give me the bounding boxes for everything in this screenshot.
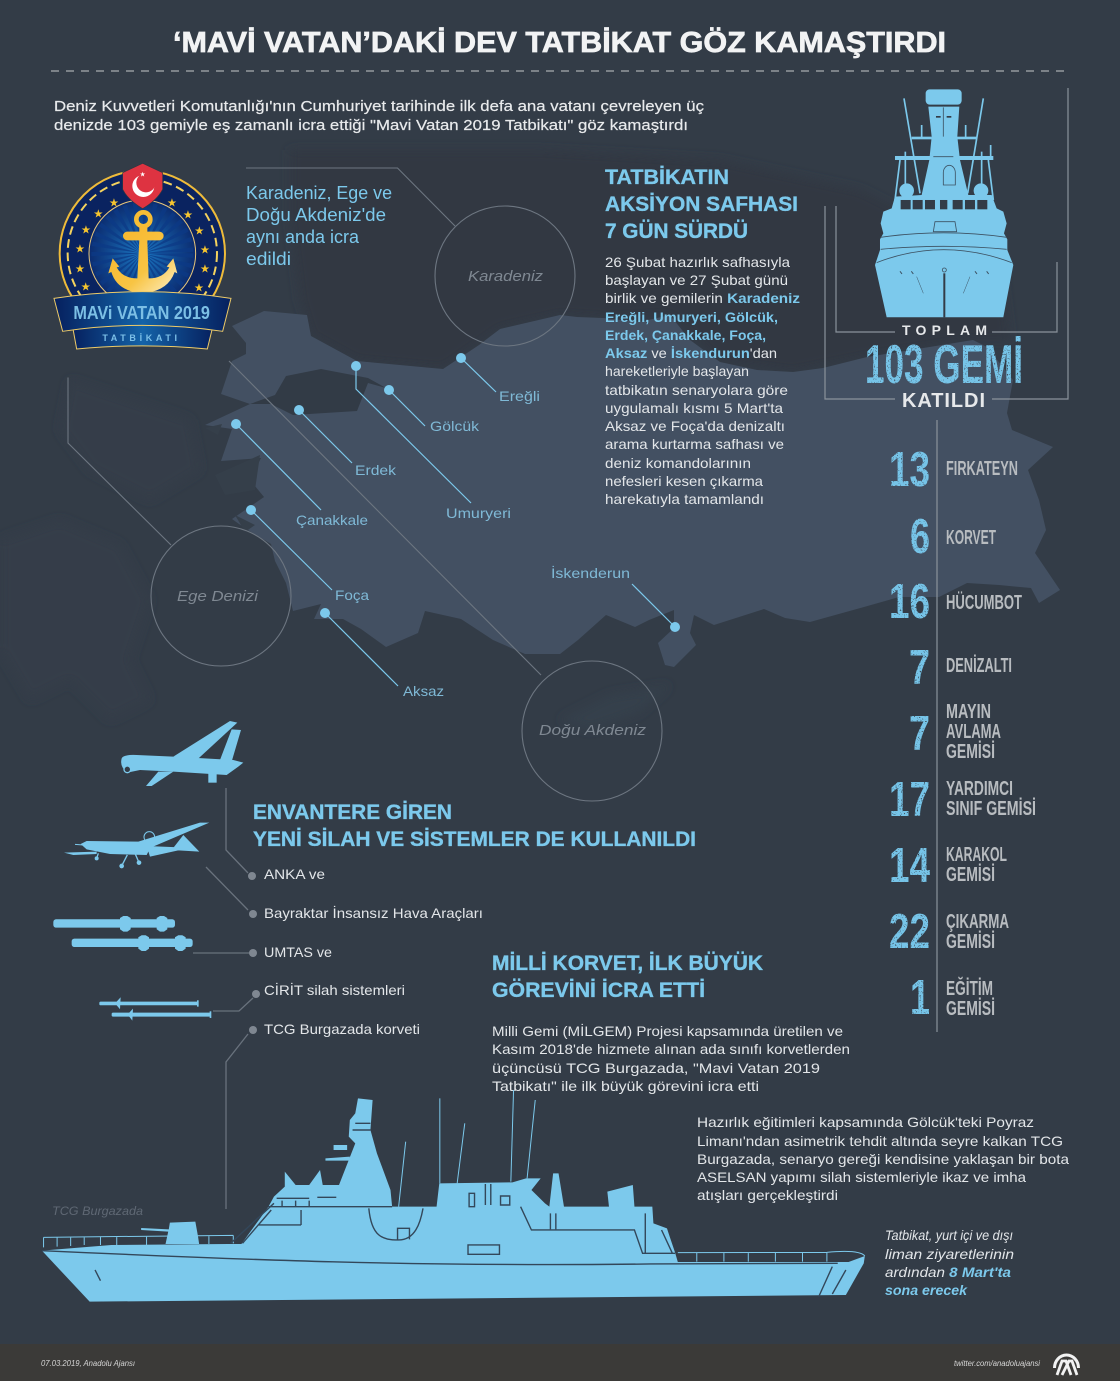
weapons list: ANKA ve [264, 866, 325, 882]
map: Black Sea and neighbouring land shading [0, 150, 1010, 730]
heading: action phase: AKSİYON SAFHASI [605, 193, 798, 216]
intro text [54, 99, 704, 134]
text: training details: atışları gerçekleştirdi [697, 1187, 838, 1203]
ship counts: 14 [889, 839, 930, 893]
ship counts: 22 [889, 905, 930, 959]
text: MILGEM project: Milli Gemi (MİLGEM) Projesi kapsamında üretilen ve [492, 1022, 843, 1039]
ship categories: GEMİSİ [946, 930, 995, 953]
port labels: Umuryeri [446, 505, 511, 521]
icon: corvette side view [42, 1090, 865, 1302]
text: action phase body: hareketleriyle başlayan [605, 363, 749, 379]
heading: national corvette: GÖREVİNİ İCRA ETTİ [492, 979, 705, 1002]
ship categories: AVLAMA [946, 721, 1001, 743]
ship categories: SINIF GEMİSİ [946, 797, 1036, 820]
text: action phase body: Aksaz ve Foça'da denizaltı [605, 418, 785, 434]
ship counts: 7 [909, 641, 930, 695]
ship categories: HÜCUMBOT [946, 591, 1022, 614]
intro text: denizde 103 gemiyle eş zamanlı icra ettiği "Mavi Vatan 2019 Tatbikatı" göz kamaştırdı [54, 118, 688, 134]
port labels: Ereğli [499, 388, 540, 404]
total label: TOPLAM [902, 322, 987, 338]
port labels: Foça [335, 587, 369, 603]
text: action phase body [605, 254, 800, 507]
frame lines around front-view ship [825, 88, 1068, 399]
heading: action phase [605, 166, 798, 243]
heading: national corvette [492, 952, 763, 1002]
badge ribbon upper: MAVi VATAN 2019 [73, 302, 210, 323]
heading: action phase: TATBİKATIN [605, 166, 729, 189]
weapons list [248, 866, 483, 1037]
ship categories: GEMİSİ [946, 997, 995, 1020]
text: action phase body: nefesleri kesen çıkarma [605, 473, 763, 489]
text: action phase body: 26 Şubat hazırlık safhasıyla [605, 254, 790, 270]
text: action phase body: Erdek, Çanakkale, Foça, [605, 327, 766, 343]
badge stars: ★ [194, 226, 204, 238]
ship categories: GEMİSİ [946, 863, 995, 886]
callout: three seas: aynı anda icra [246, 227, 360, 247]
ship counts: 16 [889, 575, 930, 629]
ship breakdown divider [936, 420, 938, 1032]
text: action phase body: başlayan ve 27 Şubat günü [605, 272, 788, 288]
text: training details: Burgazada, senaryo gereği kendisine yaklaşan bir bota [697, 1151, 1069, 1167]
footer date: 07.03.2019, Anadolu Ajansı [41, 1359, 135, 1368]
weapons list: UMTAS ve [264, 944, 332, 960]
port labels: Gölcük [430, 418, 480, 434]
ship counts: 13 [889, 443, 930, 497]
sea names: Karadeniz [468, 269, 544, 285]
heading: new weapons: ENVANTERE GİREN [253, 801, 452, 824]
icon: UMTAS missiles [53, 916, 193, 951]
port labels: İskenderun [551, 564, 630, 581]
ship counts [889, 443, 930, 1025]
text: action phase body: harekatıyla tamamlandı [605, 491, 764, 507]
heading: new weapons [253, 801, 696, 851]
weapons list: CİRİT silah sistemleri [264, 981, 405, 998]
ship categories: YARDIMCI [946, 778, 1013, 800]
text: action phase body: Ereğli, Umuryeri, Gölcük, [605, 309, 778, 325]
text: action phase body: Aksaz ve İskendurun'dan [605, 345, 777, 361]
text: MILGEM project: üçüncüsü TCG Burgazada, "Mavi Vatan 2019 [492, 1060, 820, 1076]
badge stars: ★ [81, 224, 91, 236]
ship counts: 6 [910, 510, 930, 564]
sea names [177, 269, 647, 739]
callout: three seas [246, 183, 392, 269]
footer twitter: twitter.com/anadoluajansi [954, 1359, 1040, 1368]
badge stars: ★ [200, 244, 210, 256]
text: end date [885, 1227, 1014, 1298]
text: end date: liman ziyaretlerinin [885, 1246, 1014, 1262]
icon: agency logo [1054, 1355, 1078, 1375]
badge stars: ★ [167, 197, 177, 209]
badge shield [123, 163, 163, 209]
text: MILGEM project [492, 1022, 850, 1094]
sea callouts: circles and leader lines [68, 168, 662, 801]
footer bar [0, 1344, 1120, 1381]
intro text: Deniz Kuvvetleri Komutanlığı'nın Cumhuriyet tarihinde ilk defa ana vatanı çevreleyen üç [54, 99, 704, 115]
ship counts: 17 [889, 773, 930, 827]
text: training details: ASELSAN yapımı silah sistemleriyle ikaz ve imha [697, 1169, 1026, 1185]
port labels: Aksaz [403, 683, 444, 699]
ship name: TCG Burgazada [52, 1204, 143, 1218]
callout: three seas: Karadeniz, Ege ve [246, 183, 392, 203]
badge ribbon lower [72, 322, 214, 349]
sea names: Ege Denizi [177, 589, 259, 605]
text: end date: ardından 8 Mart'ta [885, 1264, 1011, 1280]
text: action phase body: arama kurtarma safhası ve [605, 436, 784, 452]
port labels [296, 388, 630, 699]
icon: Bayraktar drone [64, 823, 209, 868]
icon: ANKA drone [121, 721, 243, 786]
badge stars: ★ [183, 209, 193, 221]
text: end date: Tatbikat, yurt içi ve dışı [885, 1227, 1013, 1243]
callout: three seas: Doğu Akdeniz'de [246, 205, 386, 225]
heading: new weapons: YENİ SİLAH VE SİSTEMLER DE KULLANILDI [253, 828, 696, 851]
ship categories: GEMİSİ [946, 740, 995, 763]
badge stars: ★ [75, 244, 85, 256]
text: MILGEM project: Tatbikatı" ile ilk büyük görevini icra etti [492, 1078, 759, 1094]
badge stars: ★ [81, 282, 91, 294]
total label [865, 322, 1023, 412]
heading: national corvette: MİLLİ KORVET, İLK BÜYÜK [492, 952, 763, 975]
badge ribbon lower: TATBİKATI [102, 333, 177, 343]
ship categories: FIRKATEYN [946, 458, 1018, 480]
ship categories: MAYIN [946, 701, 991, 723]
badge stars: ★ [75, 263, 85, 275]
callout: three seas: edildi [246, 249, 291, 269]
text: MILGEM project: Kasım 2018'de hizmete alınan ada sınıfı korvetlerden [492, 1041, 850, 1057]
ship categories: ÇIKARMA [946, 911, 1009, 933]
badge stars: ★ [109, 197, 119, 209]
text: training details [697, 1114, 1069, 1203]
badge stars: ★ [194, 282, 204, 294]
badge shield: ★ [140, 170, 146, 178]
weapons list: TCG Burgazada korveti [264, 1021, 420, 1037]
ship categories [946, 458, 1036, 1020]
map: Sea of Marmara [250, 369, 386, 415]
port labels: Erdek [355, 462, 397, 478]
text: action phase body: uygulamalı kısmı 5 Mart'ta [605, 400, 783, 416]
badge ribbon upper [54, 292, 231, 331]
text: action phase body: birlik ve gemilerin Karadeniz [605, 290, 800, 306]
total number: 103 GEMİ [865, 333, 1023, 395]
ship counts: 7 [909, 707, 930, 761]
total label: KATILDI [902, 390, 985, 412]
badge anchor [108, 212, 177, 293]
map: Turkey [205, 311, 1060, 667]
badge: Mavi Vatan 2019 [54, 163, 231, 349]
text: training details: Limanı'ndan asimetrik tehdit altında seyre kalkan TCG [697, 1133, 1063, 1149]
badge stars: ★ [200, 264, 210, 276]
port markers and lines [231, 353, 680, 686]
weapons list: Bayraktar İnsansız Hava Araçları [264, 904, 483, 921]
text: training details: Hazırlık eğitimleri kapsamında Gölcük'teki Poyraz [697, 1114, 1034, 1130]
text: action phase body: tatbikatın senaryolara göre [605, 382, 788, 398]
text: end date: sona erecek [885, 1282, 968, 1298]
ship categories: KORVET [946, 527, 996, 549]
heading: action phase: 7 GÜN SÜRDÜ [605, 220, 748, 243]
ship categories: EĞİTİM [946, 976, 993, 1000]
ship categories: DENİZALTI [946, 654, 1012, 677]
text: action phase body: deniz komandolarının [605, 455, 751, 471]
badge stars: ★ [93, 208, 103, 220]
ship categories: KARAKOL [946, 844, 1007, 866]
sea names: Doğu Akdeniz [539, 723, 647, 739]
ship counts: 1 [910, 971, 930, 1025]
icons: drones and missiles [53, 721, 243, 1021]
icon: warship front view [875, 89, 1013, 317]
badge stars [75, 197, 210, 294]
leader lines for weapons list [193, 788, 253, 1209]
port labels: Çanakkale [296, 512, 368, 528]
icon: CIRIT missiles [99, 997, 211, 1021]
title: ‘MAVİ VATAN’DAKİ DEV TATBİKAT GÖZ KAMAŞTIRDI [173, 26, 946, 59]
map: Aegean islands [205, 424, 260, 532]
